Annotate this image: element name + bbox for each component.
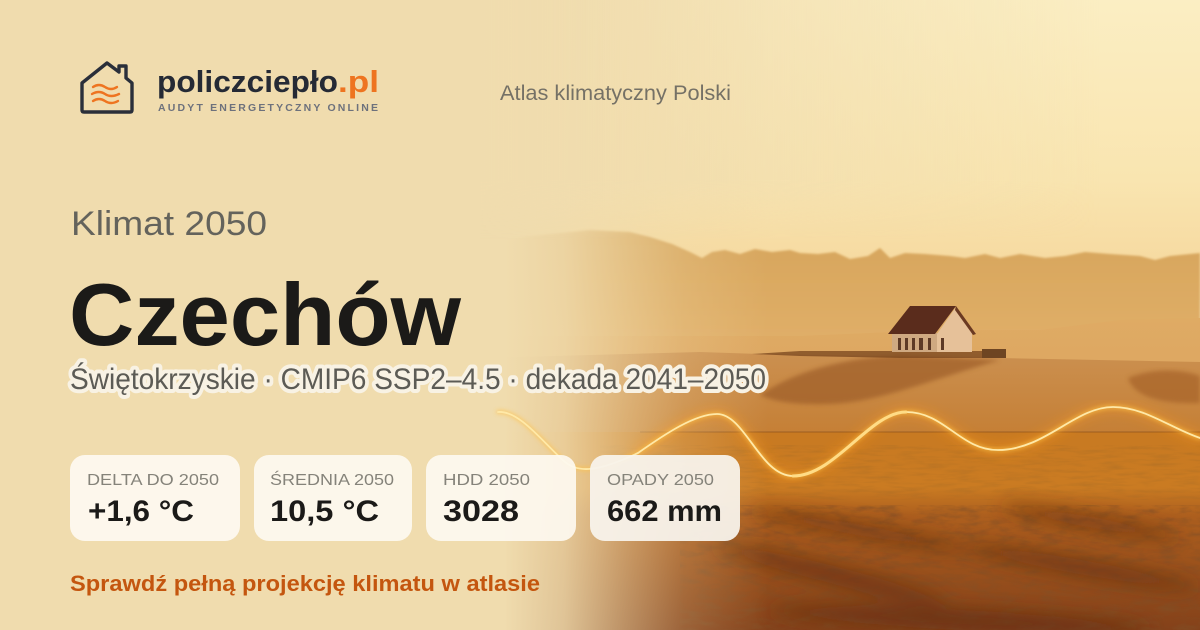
value: 3028 bbox=[443, 495, 519, 528]
value: 10,5 °C bbox=[270, 495, 379, 528]
fields: upper rolling dunes bbox=[480, 352, 1200, 450]
distant hills bbox=[480, 318, 1200, 380]
fields: lower foreground bbox=[480, 432, 1200, 630]
house roof bbox=[888, 306, 956, 334]
header label: Atlas klimatyczny Polski bbox=[500, 82, 731, 105]
kicker: Klimat 2050 bbox=[71, 205, 267, 243]
label: OPADY 2050 bbox=[607, 472, 714, 489]
logo wordmark: policzciepło bbox=[157, 64, 338, 99]
brightest wave segment bbox=[793, 412, 906, 476]
house front wall bbox=[892, 333, 971, 352]
field texture bbox=[600, 445, 1200, 500]
value: 662 mm bbox=[607, 495, 722, 528]
title: Czechów bbox=[69, 265, 462, 364]
label: HDD 2050 bbox=[443, 472, 530, 489]
glowing temperature wave bbox=[498, 407, 1200, 476]
illustration: house on the hill bbox=[752, 306, 1006, 358]
label: ŚREDNIA 2050 bbox=[270, 470, 394, 489]
stat card: precipitation bbox=[590, 455, 740, 541]
tree line bbox=[480, 230, 1200, 360]
subtitle with halo: Świętokrzyskie · CMIP6 SSP2–4.5 · dekada 2041–2050 bbox=[70, 362, 766, 396]
logo domain: .pl bbox=[338, 64, 379, 99]
value: +1,6 °C bbox=[88, 495, 194, 528]
horizon line in the field bbox=[640, 431, 1200, 433]
stat card: HDD bbox=[426, 455, 576, 541]
stat card: delta bbox=[70, 455, 240, 541]
logo bbox=[82, 63, 379, 114]
label: DELTA DO 2050 bbox=[87, 472, 219, 489]
stat card: average bbox=[254, 455, 412, 541]
dark crop rows bbox=[711, 499, 1200, 630]
dune shadow bbox=[760, 355, 1000, 404]
icon: house with heat waves bbox=[82, 63, 132, 112]
call to action: Sprawdź pełną projekcję klimatu w atlasie bbox=[70, 571, 540, 596]
logo tagline: AUDYT ENERGETYCZNY ONLINE bbox=[158, 102, 378, 114]
house windows bbox=[898, 338, 944, 350]
house gable bbox=[937, 307, 972, 352]
